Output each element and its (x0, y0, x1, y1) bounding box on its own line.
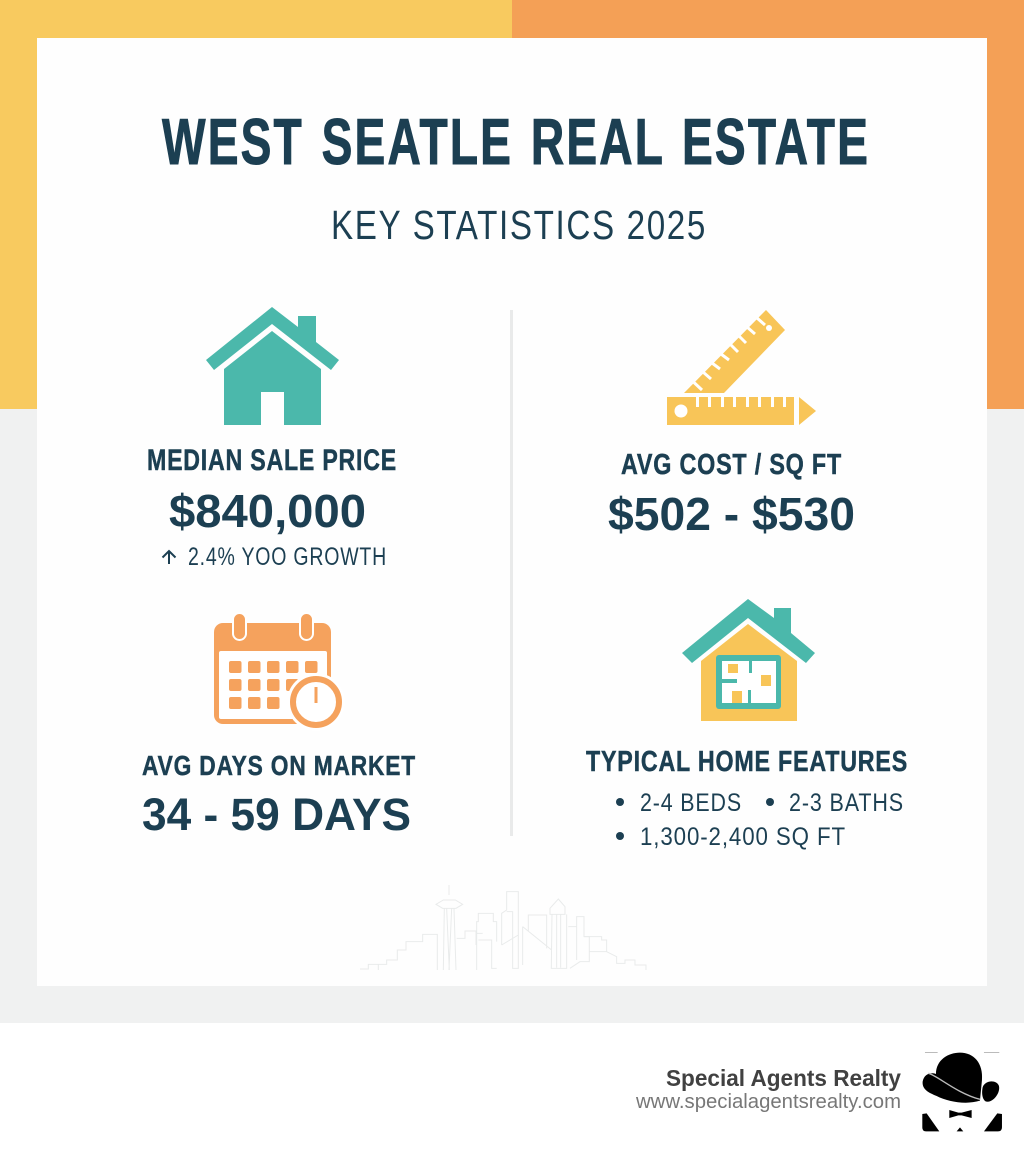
panel: average days on market (142, 613, 416, 840)
label: average cost per square foot: AVG COST / SQ FT (621, 449, 842, 481)
label: median sale price: MEDIAN SALE PRICE (147, 444, 397, 477)
company name: Special Agents Realty (666, 1065, 901, 1091)
icon: orange calendar with clock (214, 613, 345, 731)
label: typical home features: TYPICAL HOME FEATURES (586, 746, 908, 778)
value: median price: $840,000 (169, 485, 366, 537)
divider (510, 310, 513, 836)
footer brand (635, 1052, 1002, 1131)
panel: typical home features (586, 599, 908, 851)
icon: yellow rulers (667, 310, 816, 425)
icon: logo with hat and bow tie (922, 1052, 1002, 1131)
background: yellow top left block (0, 0, 512, 409)
icon: house with floor plan (682, 599, 815, 721)
feature: beds: 2-4 BEDS (640, 789, 742, 817)
feature: baths: 2-3 BATHS (789, 789, 904, 817)
label: average days on market: AVG DAYS ON MARKET (142, 750, 416, 781)
value: cost range: $502 - $530 (608, 488, 855, 540)
panel: average cost per square foot (608, 310, 855, 540)
skyline illustration (360, 885, 646, 970)
growth note with arrow: 2.4% YOO GROWTH (188, 543, 387, 571)
panel: median sale price (147, 307, 397, 571)
footer background (0, 1023, 1024, 1154)
background: grey band (0, 409, 1024, 1023)
value: days range: 34 - 59 DAYS (142, 789, 411, 840)
panel: main white card (37, 38, 987, 986)
background: orange top right block (512, 0, 1024, 409)
icon: teal house (206, 307, 339, 425)
feature: square footage: 1,300-2,400 SQ FT (640, 823, 846, 851)
subtitle: KEY STATISTICS 2025 (331, 202, 707, 248)
website: www.specialagentsrealty.com (635, 1091, 901, 1113)
